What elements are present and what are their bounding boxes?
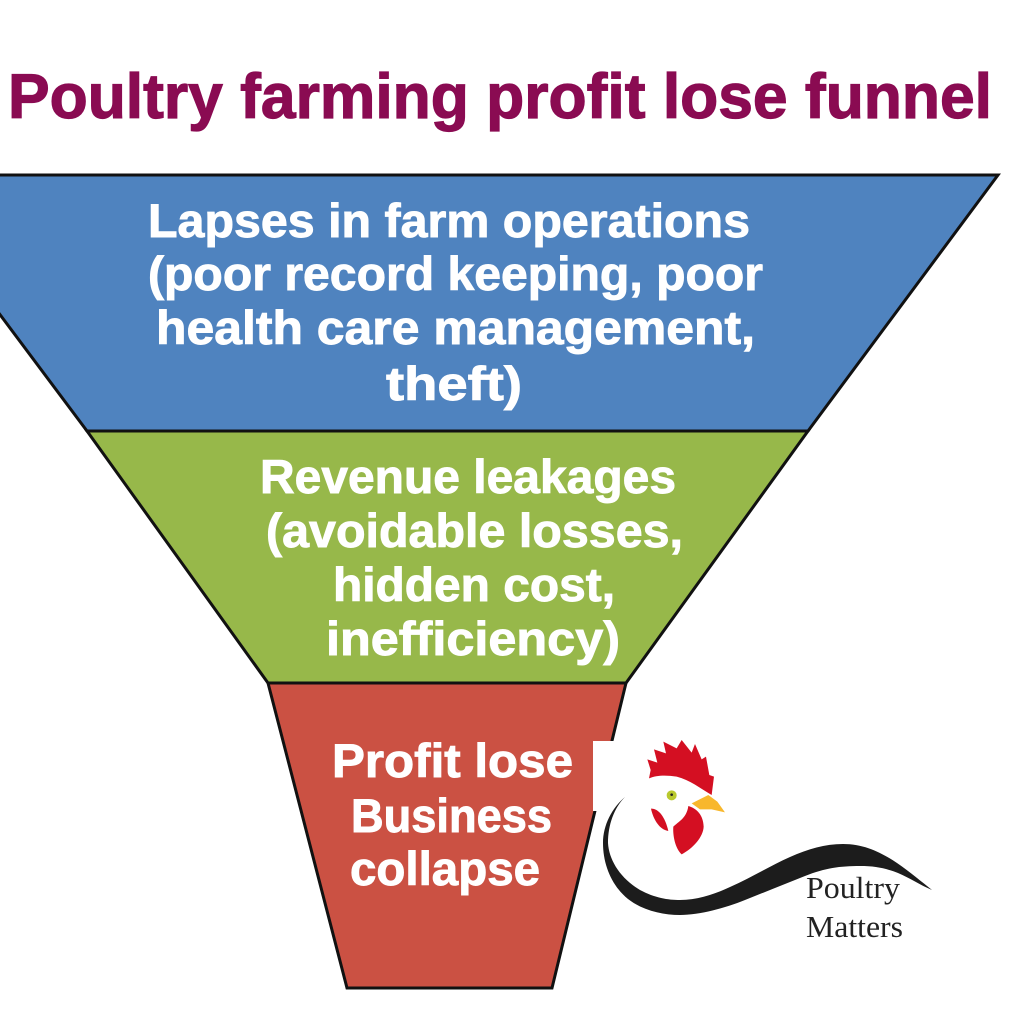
icon: rooster head [647,740,725,854]
panel: revenue leakages [87,431,808,683]
panel: profit loss: Business [351,789,552,842]
panel: farm operations lapses: Lapses in farm operations [148,194,750,247]
panel: farm operations lapses: health care management, [156,301,755,354]
panel: farm operations lapses: (poor record keeping, poor [148,247,763,300]
panel: revenue leakages: Revenue leakages [260,450,676,503]
panel: revenue leakages: hidden cost, [333,558,615,611]
funnel [0,175,998,988]
logo text: Matters [806,909,903,944]
logo: Poultry Matters [593,740,932,944]
panel: profit loss: Profit lose [332,734,573,787]
panel: profit loss [268,683,626,988]
logo text: Poultry [806,870,901,905]
panel: farm operations lapses: theft) [386,357,522,410]
icon: swoosh [603,797,932,915]
title: Poultry farming profit lose funnel [8,62,992,132]
logo text [806,870,903,944]
panel: revenue leakages: (avoidable losses, [266,504,683,557]
panel: revenue leakages: inefficiency) [326,612,620,665]
panel: profit loss: collapse [350,842,540,895]
panel: farm operations lapses [0,175,998,431]
